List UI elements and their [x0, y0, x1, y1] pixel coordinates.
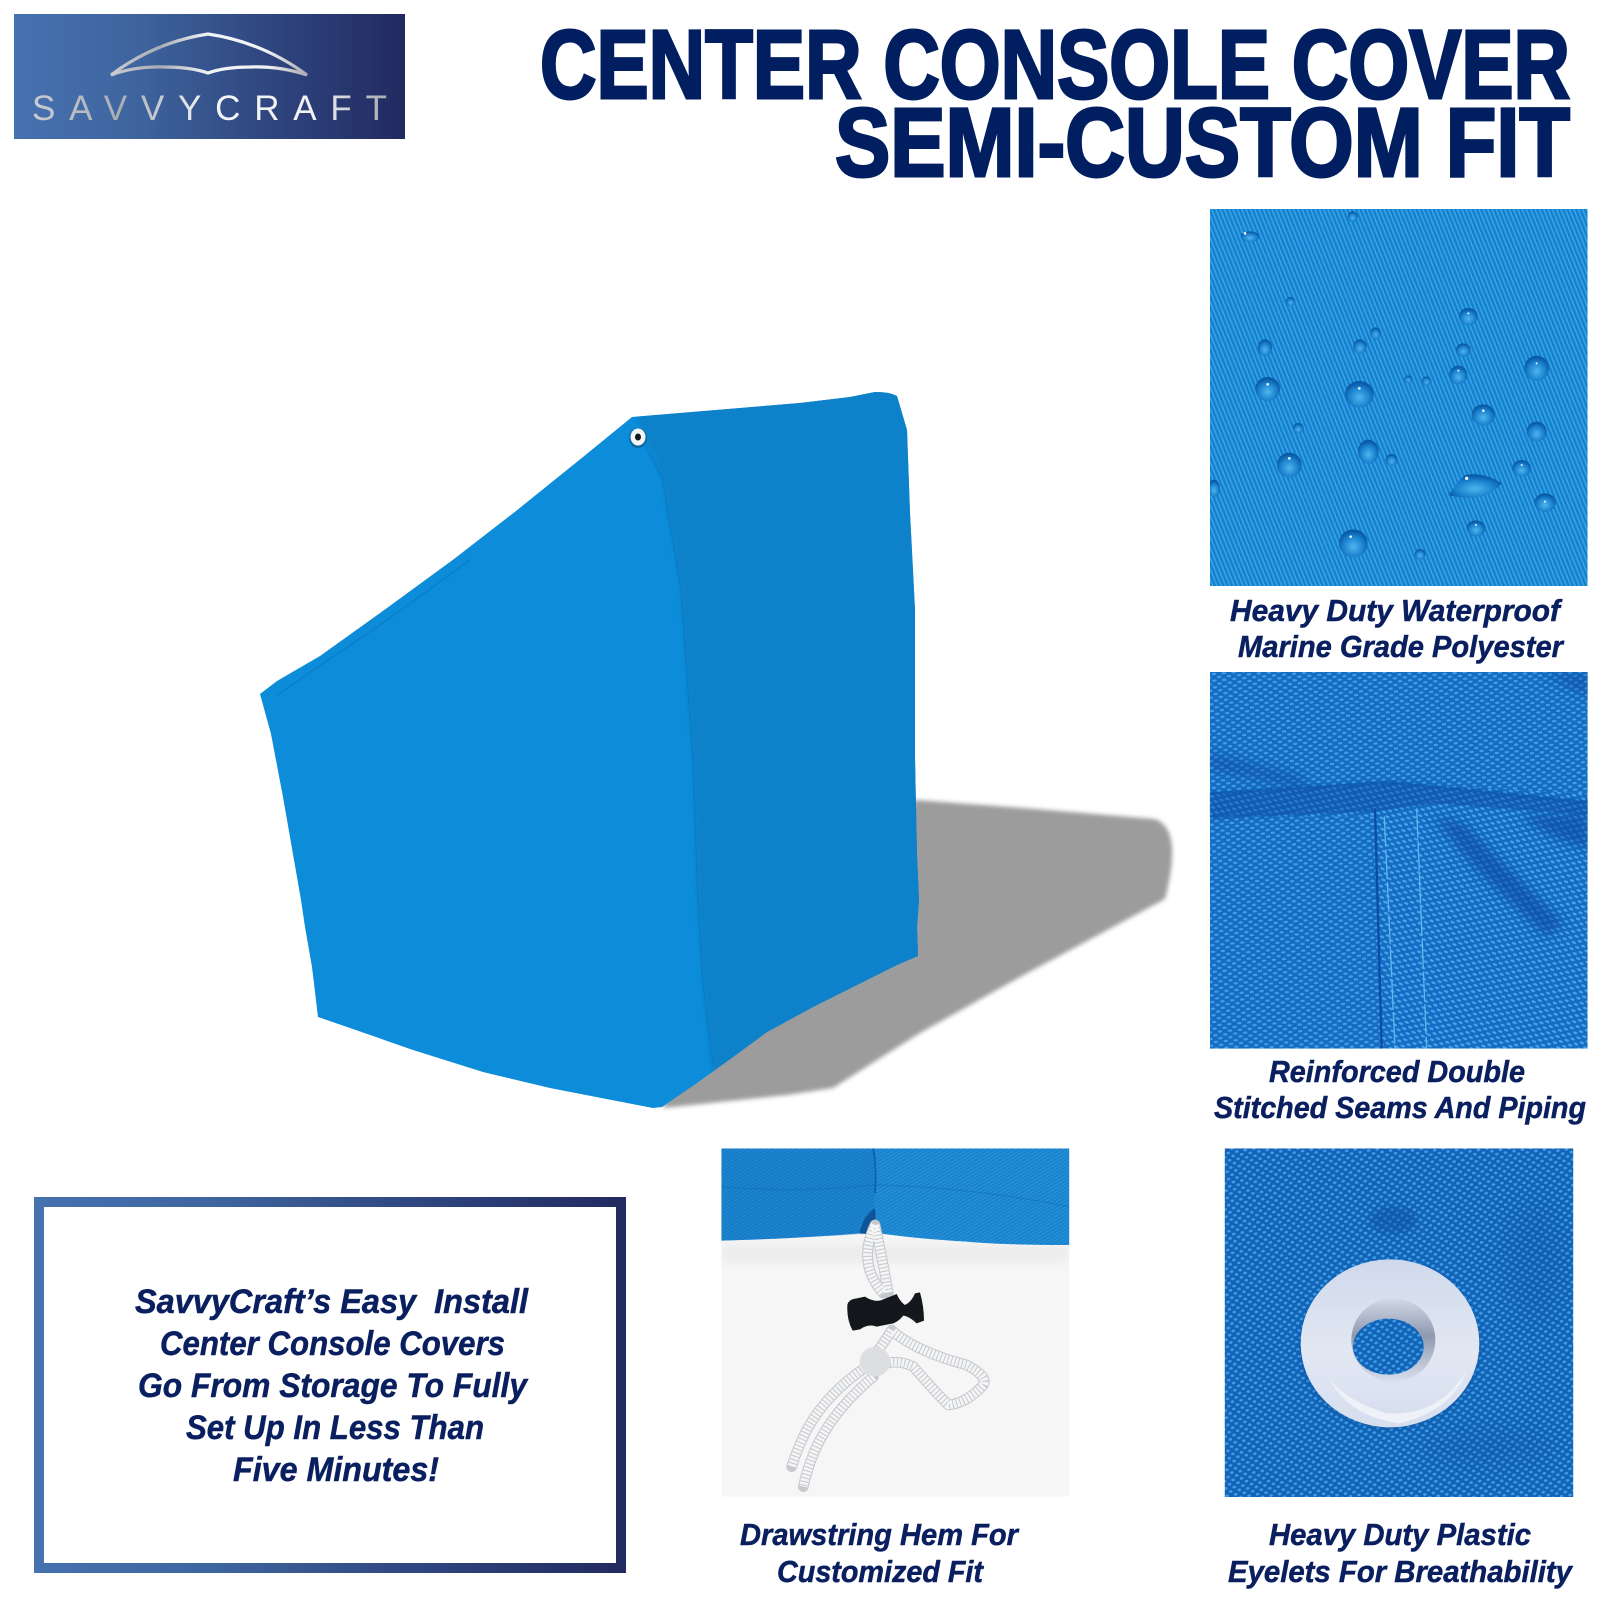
blue hem fabric [721, 1148, 1069, 1245]
callout text: Set Up In Less Than [186, 1409, 484, 1447]
caption: seams and piping [1214, 1054, 1586, 1125]
icon: grommet [629, 428, 647, 448]
callout text: Center Console Covers [160, 1325, 505, 1363]
callout text: SavvyCraft’s Easy Install [135, 1283, 529, 1321]
water droplets [1208, 211, 1556, 560]
callout text: Five Minutes! [233, 1451, 439, 1489]
panel: stitched seam fabric [1210, 672, 1588, 1049]
caption: plastic eyelets: Eyelets For Breathability [1228, 1554, 1574, 1589]
caption: waterproof polyester: Heavy Duty Waterproof [1230, 593, 1563, 628]
caption: drawstring hem [740, 1517, 1020, 1589]
cast shadow [663, 800, 1172, 1108]
caption: drawstring hem: Drawstring Hem For [740, 1517, 1020, 1552]
panel: waterproof fabric [1208, 209, 1588, 586]
callout: easy install box [34, 1197, 626, 1573]
icon: cord lock toggle [847, 1292, 924, 1331]
caption: plastic eyelets [1228, 1517, 1574, 1589]
caption: seams and piping: Reinforced Double [1269, 1054, 1525, 1089]
piping seam [1210, 783, 1588, 803]
title [540, 10, 1570, 197]
side face [635, 392, 919, 1072]
stitching [1375, 808, 1427, 1049]
icon: boat hull mark [111, 34, 307, 75]
caption: plastic eyelets: Heavy Duty Plastic [1269, 1517, 1531, 1552]
icon: eyelet ring [1299, 1259, 1481, 1429]
logo wordmark: SAVVYCRAFT [32, 89, 387, 128]
cover body [250, 380, 950, 1120]
main product: center console cover with shadow [250, 380, 1172, 1120]
panel: plastic eyelet [1225, 1148, 1573, 1497]
caption: drawstring hem: Customized Fit [777, 1554, 985, 1589]
logo [14, 14, 405, 139]
caption: waterproof polyester [1230, 593, 1565, 664]
panel: drawstring hem [721, 1148, 1069, 1497]
soft fold shadows [1210, 673, 1588, 937]
callout text: Go From Storage To Fully [138, 1367, 529, 1405]
caption: waterproof polyester: Marine Grade Polyester [1238, 629, 1565, 664]
drawstring rope [792, 1225, 984, 1487]
callout text [135, 1283, 529, 1489]
